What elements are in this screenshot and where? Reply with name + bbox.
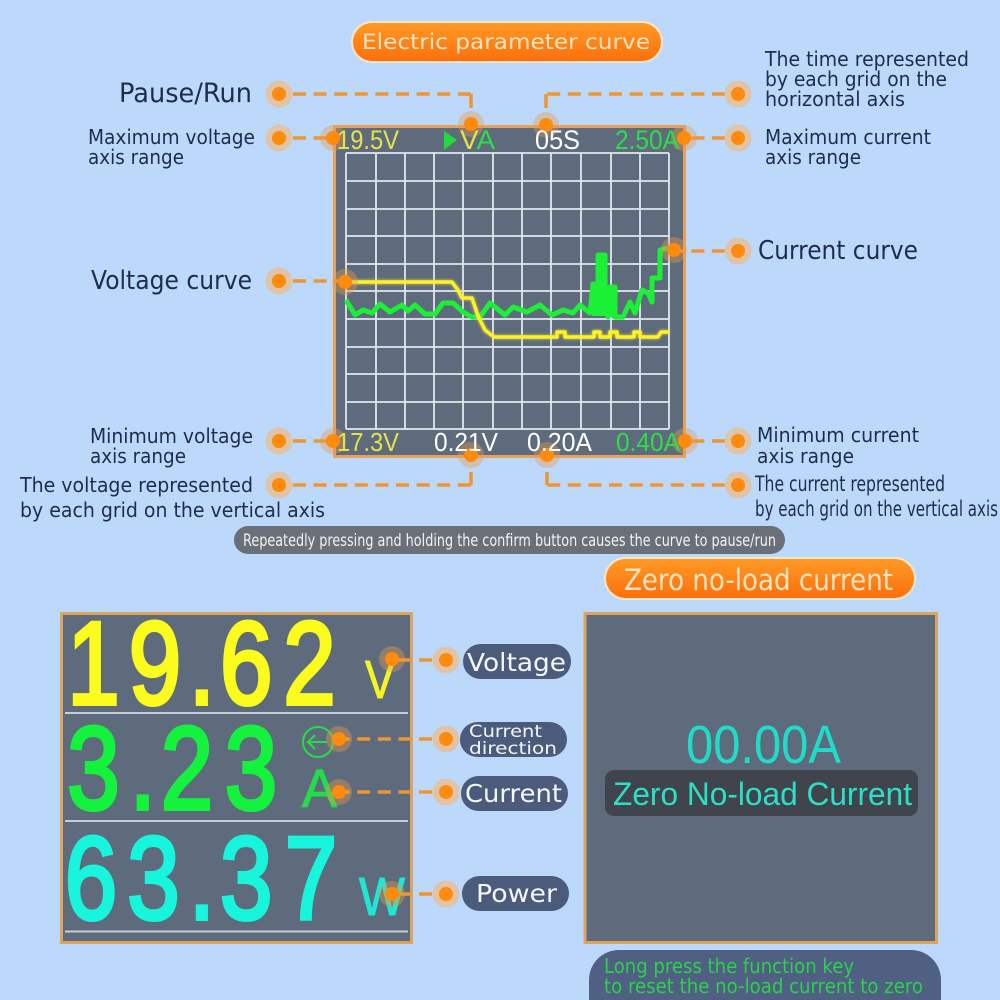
label: current curve: Current curve bbox=[758, 236, 918, 266]
label: maximum current axis range bbox=[765, 125, 931, 169]
reading: 00.00A: 00.00A bbox=[686, 715, 841, 775]
label: time per grid: The time represented bbox=[764, 47, 969, 71]
bottom readouts: 0.21V bbox=[434, 427, 499, 457]
label: time per grid: horizontal axis bbox=[765, 87, 905, 111]
note: long press instruction bbox=[589, 950, 941, 1000]
label: current per grid bbox=[754, 472, 998, 521]
label: voltage per grid bbox=[19, 473, 325, 522]
label: maximum voltage axis range: axis range bbox=[88, 145, 184, 169]
label: minimum current axis range: axis range bbox=[757, 444, 854, 468]
label: voltage curve: Voltage curve bbox=[91, 266, 252, 296]
note: long press instruction: Long press the function key bbox=[604, 954, 854, 978]
panel: zero no-load current screen bbox=[585, 614, 936, 942]
current curve bbox=[346, 248, 668, 317]
bottom readouts bbox=[337, 427, 681, 457]
callout leaders: curve screen bbox=[266, 80, 752, 498]
tag: current direction: direction bbox=[469, 739, 557, 759]
tag: current direction bbox=[460, 722, 567, 759]
heading: zero no-load current: Zero no-load current bbox=[624, 563, 893, 597]
voltage reading: 19.62 bbox=[67, 597, 336, 729]
top readouts: 19.5V bbox=[337, 125, 399, 155]
label: pause/run: Pause/Run bbox=[119, 78, 252, 109]
bottom readouts: 0.20A bbox=[527, 427, 593, 457]
message: zero no-load current: Zero No-load Current bbox=[613, 776, 912, 812]
top readouts: VA bbox=[460, 125, 495, 155]
bottom readouts: 0.40A bbox=[616, 427, 681, 457]
label: maximum current axis range: axis range bbox=[765, 145, 861, 169]
tag: voltage: Voltage bbox=[467, 648, 566, 677]
label: maximum voltage axis range: Maximum voltage bbox=[88, 125, 255, 149]
power reading: 63.37 bbox=[65, 812, 337, 944]
voltage reading: V bbox=[365, 650, 395, 710]
tag: current direction: Current bbox=[469, 722, 542, 742]
note: pause/run instruction: Repeatedly pressing and holding the confirm button causes the curve to pause/run bbox=[243, 531, 776, 551]
heading: electric parameter curve: Electric parameter curve bbox=[362, 30, 650, 54]
voltage curve bbox=[346, 282, 669, 337]
top readouts: 2.50A bbox=[615, 125, 679, 155]
power reading: W bbox=[359, 867, 405, 927]
tag: power: Power bbox=[476, 879, 558, 908]
label: time per grid: by each grid on the bbox=[765, 67, 947, 91]
tag: current: Current bbox=[465, 779, 562, 808]
label: minimum current axis range bbox=[757, 423, 919, 468]
label: maximum current axis range: Maximum current bbox=[765, 125, 931, 149]
callouts: live readings bbox=[326, 646, 460, 908]
label: voltage per grid: The voltage represented bbox=[19, 473, 253, 497]
tag: power bbox=[462, 876, 569, 911]
note: long press instruction: to reset the no-load current to zero bbox=[604, 974, 923, 998]
chart grid bbox=[346, 153, 669, 429]
note: pause/run instruction bbox=[234, 526, 785, 554]
panel: curve screen bbox=[334, 126, 684, 456]
label: minimum voltage axis range bbox=[90, 424, 253, 468]
top readouts bbox=[337, 125, 679, 155]
bottom readouts: 17.3V bbox=[337, 427, 400, 457]
label: time per grid bbox=[764, 47, 969, 111]
current reading: A bbox=[302, 759, 337, 819]
label: minimum voltage axis range: axis range bbox=[90, 444, 186, 468]
current reading: 3.23 bbox=[67, 702, 277, 834]
panel: live readings bbox=[62, 597, 412, 944]
label: minimum voltage axis range: Minimum voltage bbox=[90, 424, 253, 448]
label: voltage per grid: by each grid on the vertical axis bbox=[20, 498, 325, 522]
heading: electric parameter curve bbox=[352, 22, 662, 62]
top readouts: 05S bbox=[535, 125, 580, 155]
label: minimum current axis range: Minimum current bbox=[757, 423, 919, 447]
label: maximum voltage axis range bbox=[88, 125, 255, 169]
